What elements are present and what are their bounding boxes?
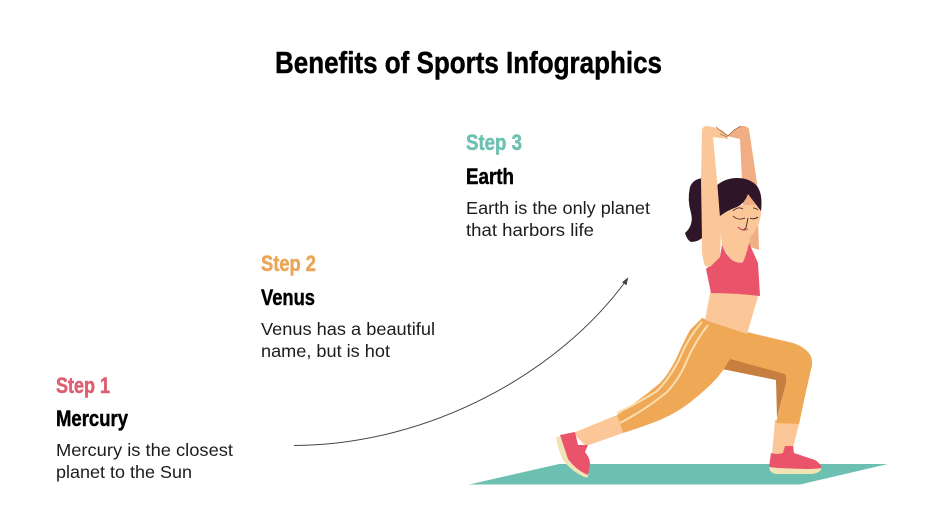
arrow: rising curve xyxy=(294,278,628,446)
back leg lower xyxy=(573,415,623,446)
step 1 description: Mercury is the closest xyxy=(56,440,233,460)
pants shadow xyxy=(722,358,786,418)
hand lines xyxy=(716,126,741,137)
facial features xyxy=(733,208,758,230)
front arm xyxy=(701,126,728,267)
front leg lower xyxy=(772,420,800,456)
crop top xyxy=(706,243,760,296)
midriff xyxy=(705,288,760,334)
step 2 description: Venus has a beautiful xyxy=(261,319,435,339)
step 2 label: Step 2 xyxy=(261,251,316,276)
step 1 description xyxy=(56,440,233,482)
front shoe xyxy=(769,446,822,474)
step 2 description: name, but is hot xyxy=(261,341,390,361)
illustration: woman in lunge stretch on mat xyxy=(469,126,888,484)
step 3 description: Earth is the only planet xyxy=(466,198,650,218)
step 3 label: Step 3 xyxy=(466,130,522,155)
hair xyxy=(716,178,762,216)
step 3 description xyxy=(466,198,650,240)
step 1 heading: Mercury xyxy=(56,406,129,431)
ponytail xyxy=(685,178,704,242)
pants stripes xyxy=(617,322,708,423)
pants xyxy=(617,318,812,433)
neck and chest xyxy=(720,225,750,263)
back arm xyxy=(727,126,759,250)
step 2 description xyxy=(261,319,435,361)
face xyxy=(718,205,761,242)
step 2 text block xyxy=(261,251,435,361)
step 1 text block xyxy=(56,373,233,482)
step 3 description: that harbors life xyxy=(466,220,594,240)
step 3 text block xyxy=(466,130,650,240)
title: Benefits of Sports Infographics xyxy=(275,45,662,80)
yoga mat xyxy=(469,464,888,484)
back shoe xyxy=(556,432,590,478)
step 1 description: planet to the Sun xyxy=(56,462,192,482)
step 3 heading: Earth xyxy=(466,164,514,189)
step 2 heading: Venus xyxy=(261,285,315,310)
step 1 label: Step 1 xyxy=(56,373,110,398)
